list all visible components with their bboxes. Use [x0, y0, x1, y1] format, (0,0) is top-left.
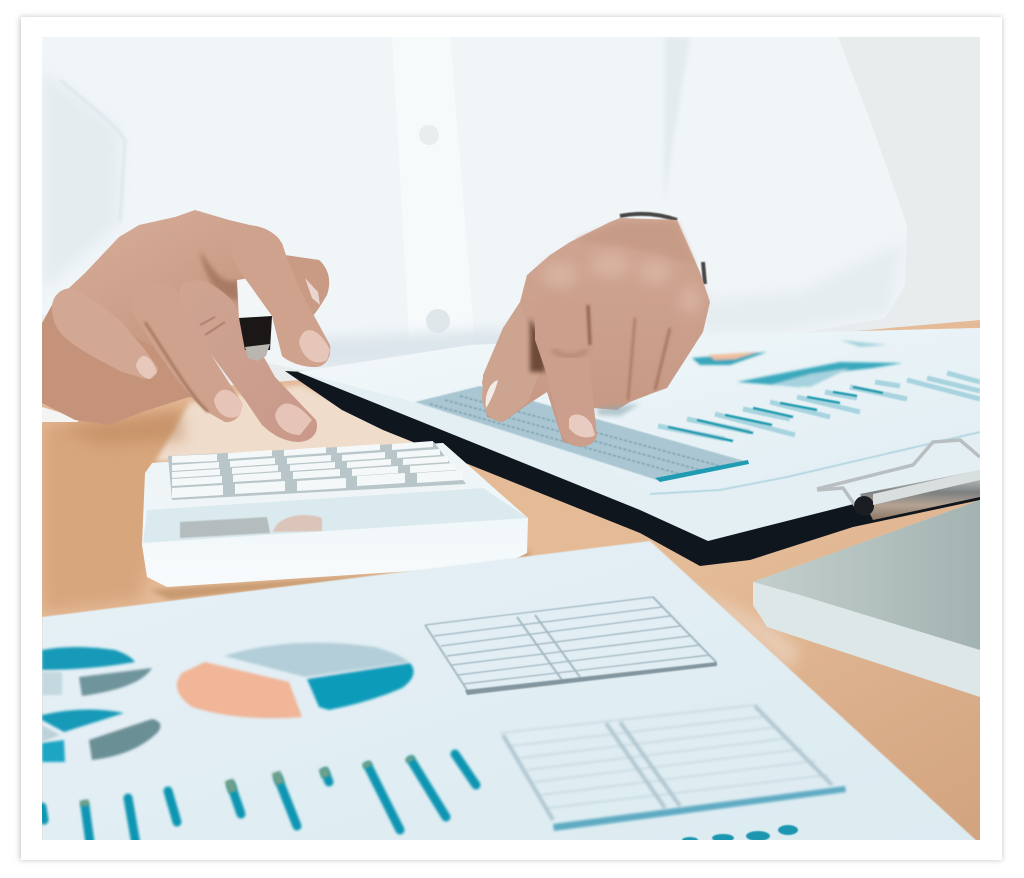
bottom row chart marks [682, 825, 798, 843]
arrow chart [737, 362, 903, 387]
table top-right [425, 597, 717, 695]
calculator body [142, 443, 528, 587]
table bottom [500, 705, 846, 831]
ring finger [52, 288, 158, 379]
metal clip [817, 440, 980, 520]
shadow below knuckles [200, 250, 240, 300]
gap shadow [530, 318, 545, 372]
tablet [753, 500, 980, 697]
pointing finger [535, 320, 597, 447]
clipboard [285, 328, 980, 566]
bars on report [658, 373, 980, 441]
table top [42, 320, 980, 840]
green bar tops [84, 757, 411, 806]
right hand [482, 214, 710, 447]
wall background [42, 37, 980, 417]
finger gaps [588, 305, 670, 400]
small pie 2 [42, 709, 160, 762]
dot matrix table [415, 386, 749, 482]
table edge highlight [650, 432, 980, 494]
thumb [482, 326, 538, 422]
calculator [142, 441, 530, 600]
small pie on report [692, 340, 888, 365]
index finger [245, 225, 330, 367]
middle finger [144, 316, 243, 422]
hand shape [482, 218, 710, 447]
pen [237, 278, 272, 361]
palm [42, 305, 192, 425]
bar chart [42, 754, 476, 850]
calculator display [143, 488, 528, 543]
large pie chart [177, 643, 414, 718]
cuff edge [620, 214, 705, 284]
foreground report paper [42, 541, 978, 850]
wrist highlight [575, 222, 695, 265]
report sheet [298, 328, 980, 541]
back of hand [52, 210, 300, 345]
small pie 1 [42, 647, 152, 696]
left hand with pen [42, 210, 330, 442]
finger behind [285, 255, 329, 320]
hand shadow on paper [597, 404, 640, 416]
table light and dark areas [42, 385, 800, 670]
knuckle highlights [542, 253, 700, 314]
keyboard panel [152, 443, 485, 480]
long finger [180, 280, 317, 442]
calculator keys [172, 441, 463, 498]
shirt [42, 37, 907, 370]
